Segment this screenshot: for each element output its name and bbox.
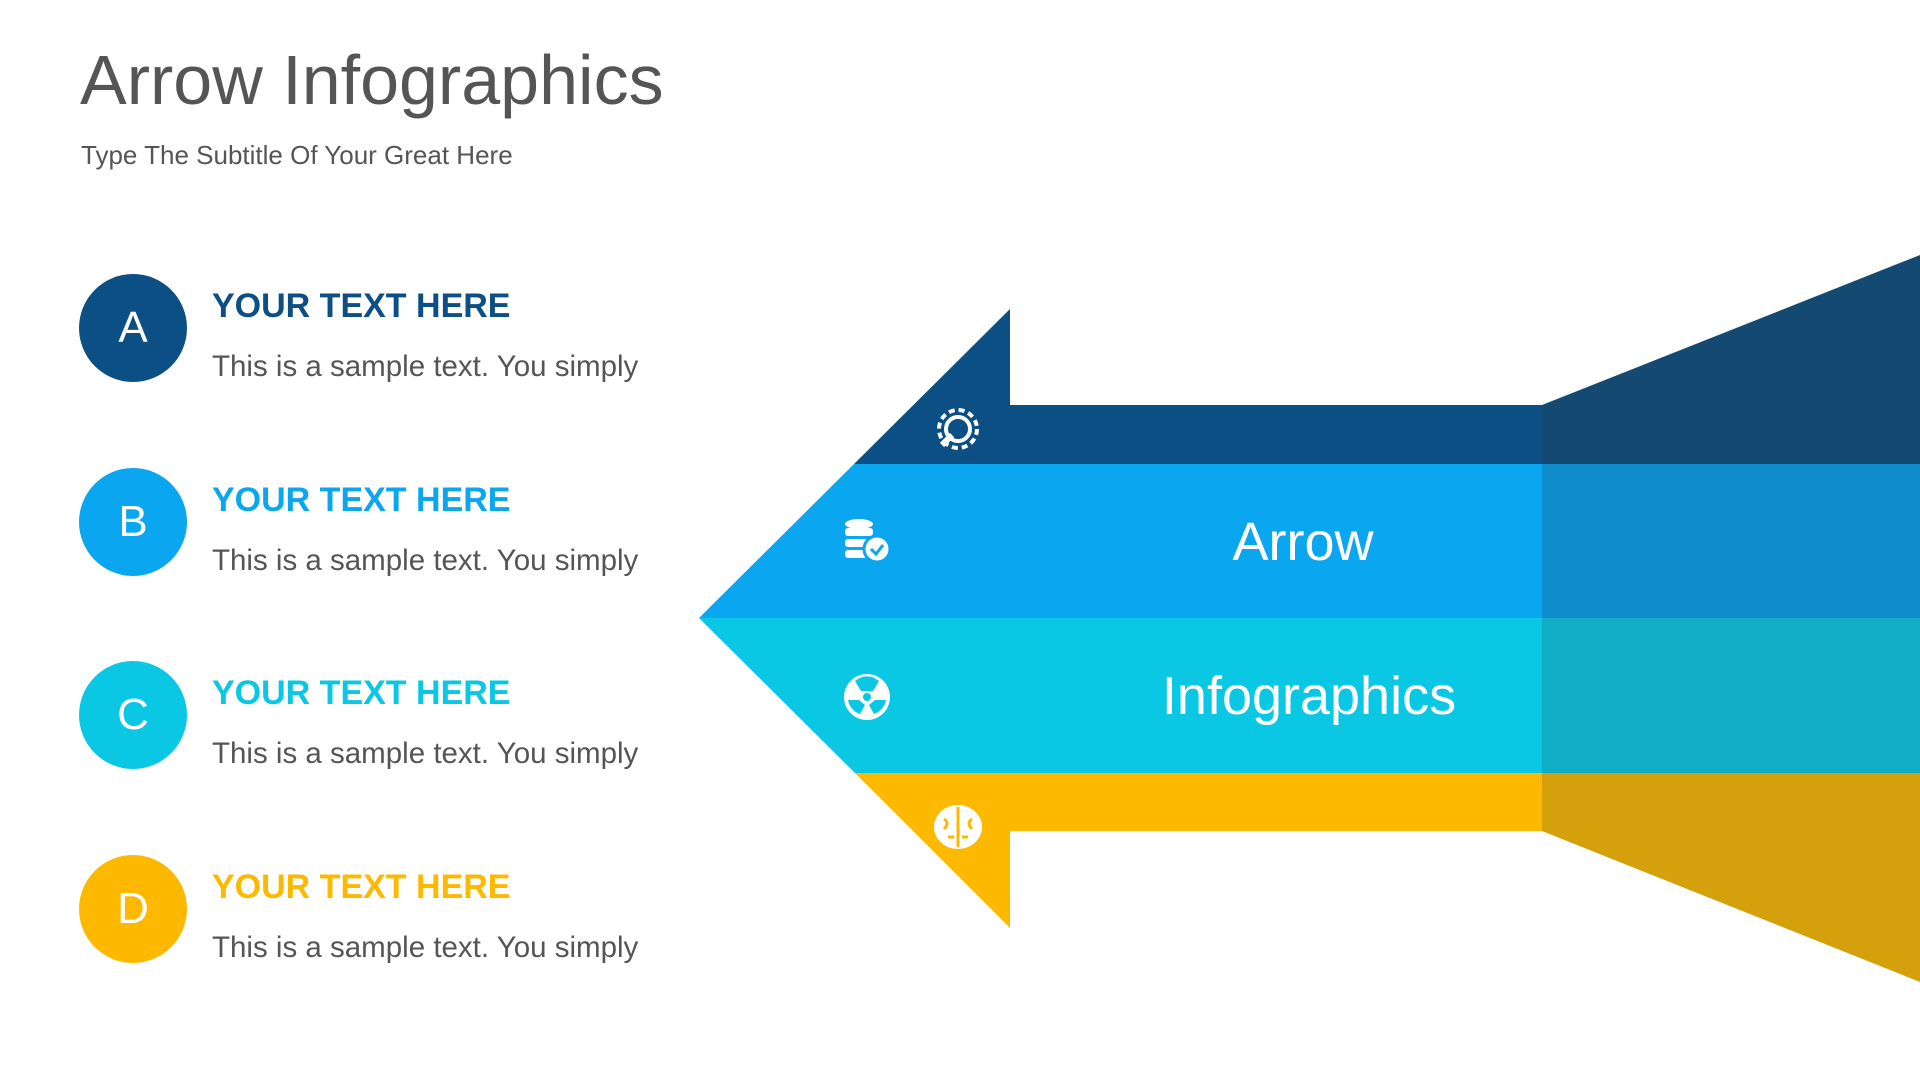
band yellow [855,773,1542,928]
icon: gear wrench [939,410,977,448]
circle C [79,661,187,769]
circle D [79,855,187,963]
circle B [79,468,187,576]
circle B: B [118,497,148,546]
heading A: YOUR TEXT HERE [212,287,510,325]
heading B: YOUR TEXT HERE [212,481,510,519]
text C: This is a sample text. You simply [212,737,638,770]
icon: brain [934,805,982,849]
tail shading [1542,255,1920,982]
circle A: A [118,303,148,352]
icon: radiation [844,674,890,720]
item D [79,855,638,964]
item C [79,661,638,770]
text B: This is a sample text. You simply [212,544,638,577]
circle A [79,274,187,382]
band cyan [699,618,1542,773]
item B [79,468,638,577]
circle C: C [117,690,149,739]
text A: This is a sample text. You simply [212,350,638,383]
item A [79,274,638,383]
circle D: D [117,884,149,933]
icon: database check [845,519,890,562]
heading D: YOUR TEXT HERE [212,868,510,906]
heading C: YOUR TEXT HERE [212,674,510,712]
label Arrow: Arrow [1232,512,1375,572]
band blue [699,464,1542,618]
band dark [854,309,1542,464]
title: Arrow Infographics [80,41,664,119]
text D: This is a sample text. You simply [212,931,638,964]
label Infographics: Infographics [1162,666,1456,726]
subtitle: Type The Subtitle Of Your Great Here [81,140,513,170]
